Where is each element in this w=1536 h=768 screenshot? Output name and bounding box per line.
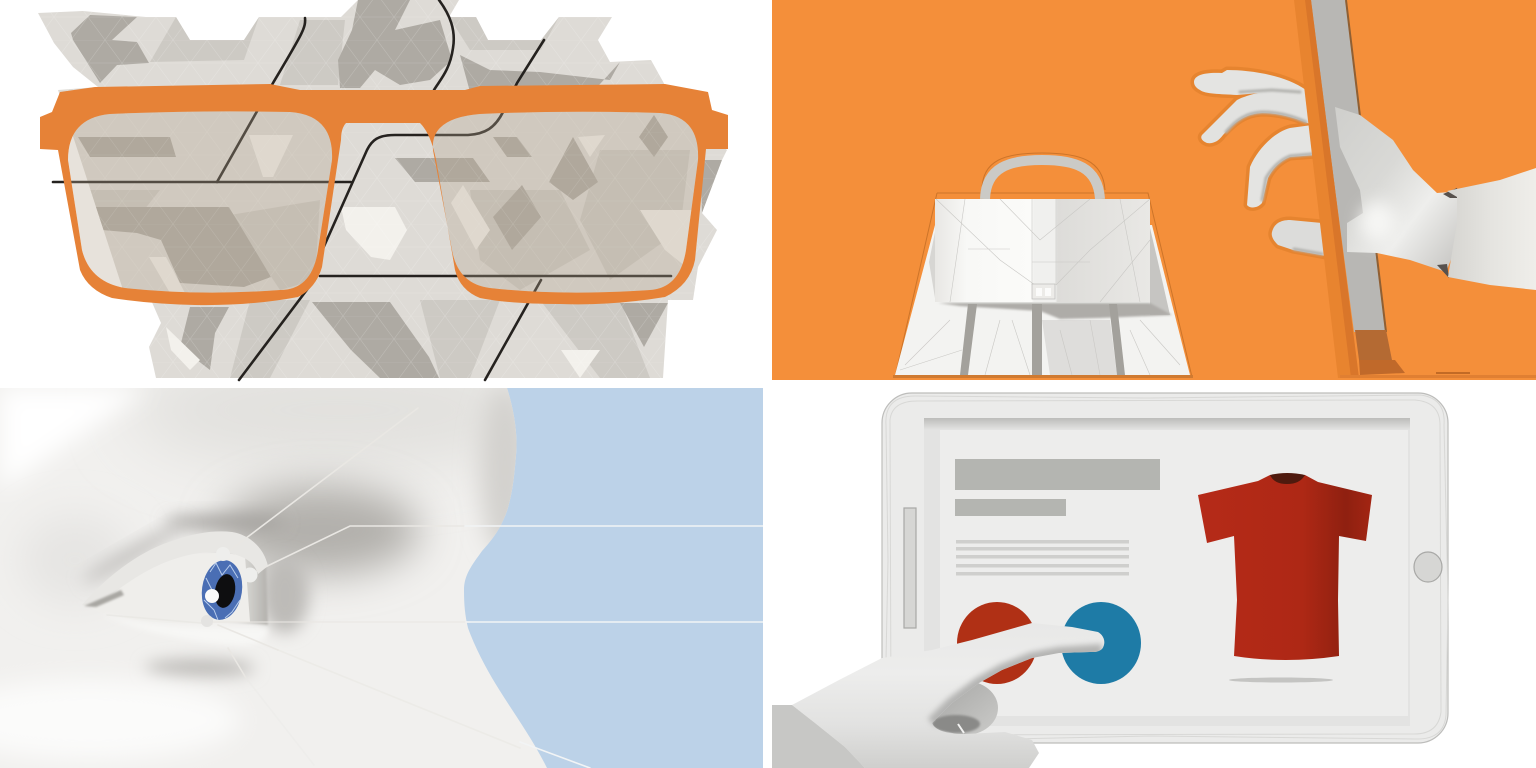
panel: tablet shopping	[772, 393, 1448, 768]
lines over face	[107, 408, 520, 765]
dark circuit lines	[53, 0, 671, 380]
side slot	[904, 508, 916, 628]
lower panel tone	[1042, 320, 1117, 375]
blue background	[440, 388, 763, 768]
finger halos	[1194, 70, 1326, 256]
t-shirt	[1198, 473, 1372, 660]
thumb	[1272, 220, 1326, 256]
bag handle	[985, 160, 1100, 199]
tablet side view	[1294, 0, 1536, 378]
face profile	[0, 350, 560, 768]
red button	[957, 602, 1037, 684]
tablet orange edge	[1294, 0, 1350, 378]
lid left shadow	[80, 517, 190, 587]
ground line	[1340, 375, 1536, 378]
curled finger	[932, 681, 998, 735]
finger shading	[932, 650, 1102, 723]
bag body	[895, 225, 1190, 375]
crevice highlight	[958, 724, 964, 733]
lines over blue	[465, 526, 763, 768]
tablet wireframe outline	[885, 395, 1448, 741]
heading bar	[955, 459, 1160, 490]
iris mesh	[204, 563, 240, 620]
screen	[940, 430, 1408, 716]
pupil	[212, 573, 238, 609]
shirt shadow	[1229, 678, 1333, 682]
screen top band	[924, 418, 1410, 430]
bag lower shadow	[938, 303, 1172, 319]
tablet body	[882, 393, 1448, 743]
tablet brown base	[1355, 330, 1392, 360]
lens tint right	[433, 112, 698, 293]
bag straps	[960, 304, 1125, 375]
socket shadow wide	[220, 485, 420, 575]
lens tint left	[68, 111, 332, 293]
finger crevice	[932, 715, 980, 733]
callout lines	[107, 408, 763, 768]
finger three	[1247, 125, 1316, 207]
cheek highlight	[0, 680, 240, 760]
brow edge shading	[480, 385, 530, 555]
panel: orange shopping scene	[772, 0, 1536, 380]
right gusset shadow	[1150, 228, 1170, 315]
ground edge under bag	[893, 375, 1193, 378]
eyeball and lid	[82, 531, 268, 645]
panel: eye close-up	[0, 350, 763, 768]
ground dash	[1436, 372, 1470, 374]
shirt cuff	[1447, 168, 1536, 290]
hand and finger	[792, 623, 1104, 768]
text lines	[956, 540, 1129, 576]
triangular mesh backdrop	[30, 0, 730, 380]
subheading bar	[955, 499, 1066, 516]
crease shadow	[84, 590, 124, 607]
callout dots	[201, 547, 258, 627]
pointing hand	[772, 623, 1104, 768]
palm highlight	[1360, 202, 1396, 242]
wireframe lines on bag	[900, 199, 1180, 375]
tablet dark edge	[1346, 0, 1386, 332]
cuff dark edge	[1437, 188, 1459, 278]
tablet screen edge	[1310, 0, 1386, 332]
orange background	[772, 0, 1536, 380]
reaching hand fingers	[1194, 70, 1326, 256]
bag clasp	[1032, 284, 1055, 299]
screen frame	[924, 418, 1410, 726]
brow shadow dark	[165, 515, 285, 529]
bag wire outline	[895, 153, 1192, 377]
left gusset shadow	[929, 232, 935, 298]
palm	[1335, 107, 1462, 272]
finger shading	[1226, 90, 1322, 254]
blue button	[1061, 602, 1141, 684]
eye white	[90, 553, 250, 623]
eyelid fold	[82, 531, 268, 607]
panel: glasses on triangular mesh	[30, 0, 730, 380]
upper left highlight	[0, 388, 150, 490]
left temple shading	[20, 515, 130, 605]
temple shadow lower	[261, 557, 309, 633]
bag flap	[935, 199, 1150, 302]
tablet orange edge shade	[1305, 0, 1359, 378]
finger two	[1201, 89, 1310, 143]
iris	[198, 558, 246, 622]
shirt collar	[1270, 473, 1305, 484]
handbag	[893, 153, 1193, 378]
reaching hand palm	[1335, 107, 1536, 290]
under eye shadow	[145, 659, 255, 677]
sleeve	[772, 705, 865, 768]
tablet stand	[1359, 360, 1405, 375]
forehead shading	[130, 350, 550, 470]
orange glasses frame	[40, 84, 728, 305]
home button	[1414, 552, 1442, 582]
lower lid light	[100, 614, 268, 645]
finger one	[1194, 70, 1306, 95]
eye socket back	[222, 552, 268, 625]
